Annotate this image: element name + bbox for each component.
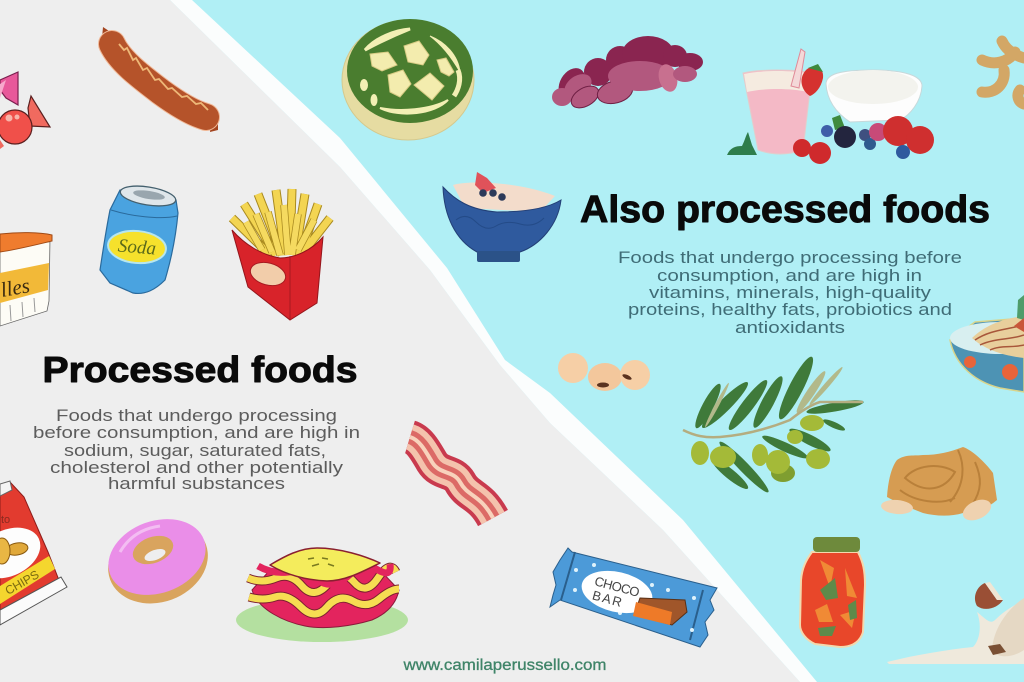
- text block: processed foods description: harmful substances: [108, 474, 285, 493]
- text block: also processed foods description: Foods that undergo processing before: [618, 248, 962, 267]
- text block: also processed foods description: proteins, healthy fats, probiotics and: [628, 300, 952, 319]
- text block: processed foods description: sodium, sugar, saturated fats,: [64, 441, 326, 460]
- icon: olive branch: [683, 354, 864, 496]
- icon: kidney beans: [552, 36, 703, 112]
- icon: cashews: [982, 41, 1024, 104]
- text block: processed foods description: cholesterol and other potentially: [50, 458, 344, 477]
- icon: pasta plate: [950, 295, 1024, 392]
- icon: donut: [96, 506, 220, 617]
- heading: also processed foods: Also processed foods: [580, 189, 990, 231]
- icon: chips bag: to: [1, 514, 10, 526]
- icon: choco bar: CHOCO: [593, 573, 641, 600]
- text: website: www.camilaperussello.com: [402, 657, 606, 674]
- icon: chips bag: [0, 481, 67, 625]
- icon: soda can: [100, 183, 178, 293]
- icon: choco bar: BAR: [591, 588, 624, 610]
- icon: peanut butter: [880, 447, 997, 524]
- icon: soybeans: [558, 353, 650, 391]
- icon: garlic and milk: [887, 582, 1024, 664]
- text block: processed foods description: Foods that undergo processing: [56, 406, 337, 425]
- text block: also processed foods description: antioxidants: [735, 318, 845, 337]
- icon: lasagna: [236, 548, 408, 642]
- icon: soda can: Soda: [117, 235, 157, 260]
- heading: processed foods: Processed foods: [42, 349, 358, 390]
- text block: processed foods description: before consumption, and are high in: [33, 423, 360, 442]
- icon: oatmeal bowl: [443, 172, 561, 262]
- icon: bacon: [410, 437, 493, 518]
- text block: also processed foods description: [618, 248, 962, 337]
- icon: choco bar: [550, 548, 717, 647]
- text block: also processed foods description: vitamins, minerals, high-quality: [649, 283, 932, 302]
- text block: also processed foods description: consumption, and are high in: [657, 266, 922, 285]
- icon: palak paneer bowl: [342, 19, 474, 140]
- panel: processed foods background: [0, 0, 800, 682]
- icon: sausage: [102, 27, 218, 132]
- icon: french fries: [232, 189, 330, 320]
- icon: smoothie and yogurt with berries: [727, 49, 934, 164]
- icon: candy: [0, 72, 50, 149]
- icon: chips bag: CHIPS: [3, 567, 41, 598]
- icon: snack tub: [0, 233, 52, 326]
- text block: processed foods description: [33, 406, 360, 493]
- icon: kimchi jar: [800, 537, 865, 647]
